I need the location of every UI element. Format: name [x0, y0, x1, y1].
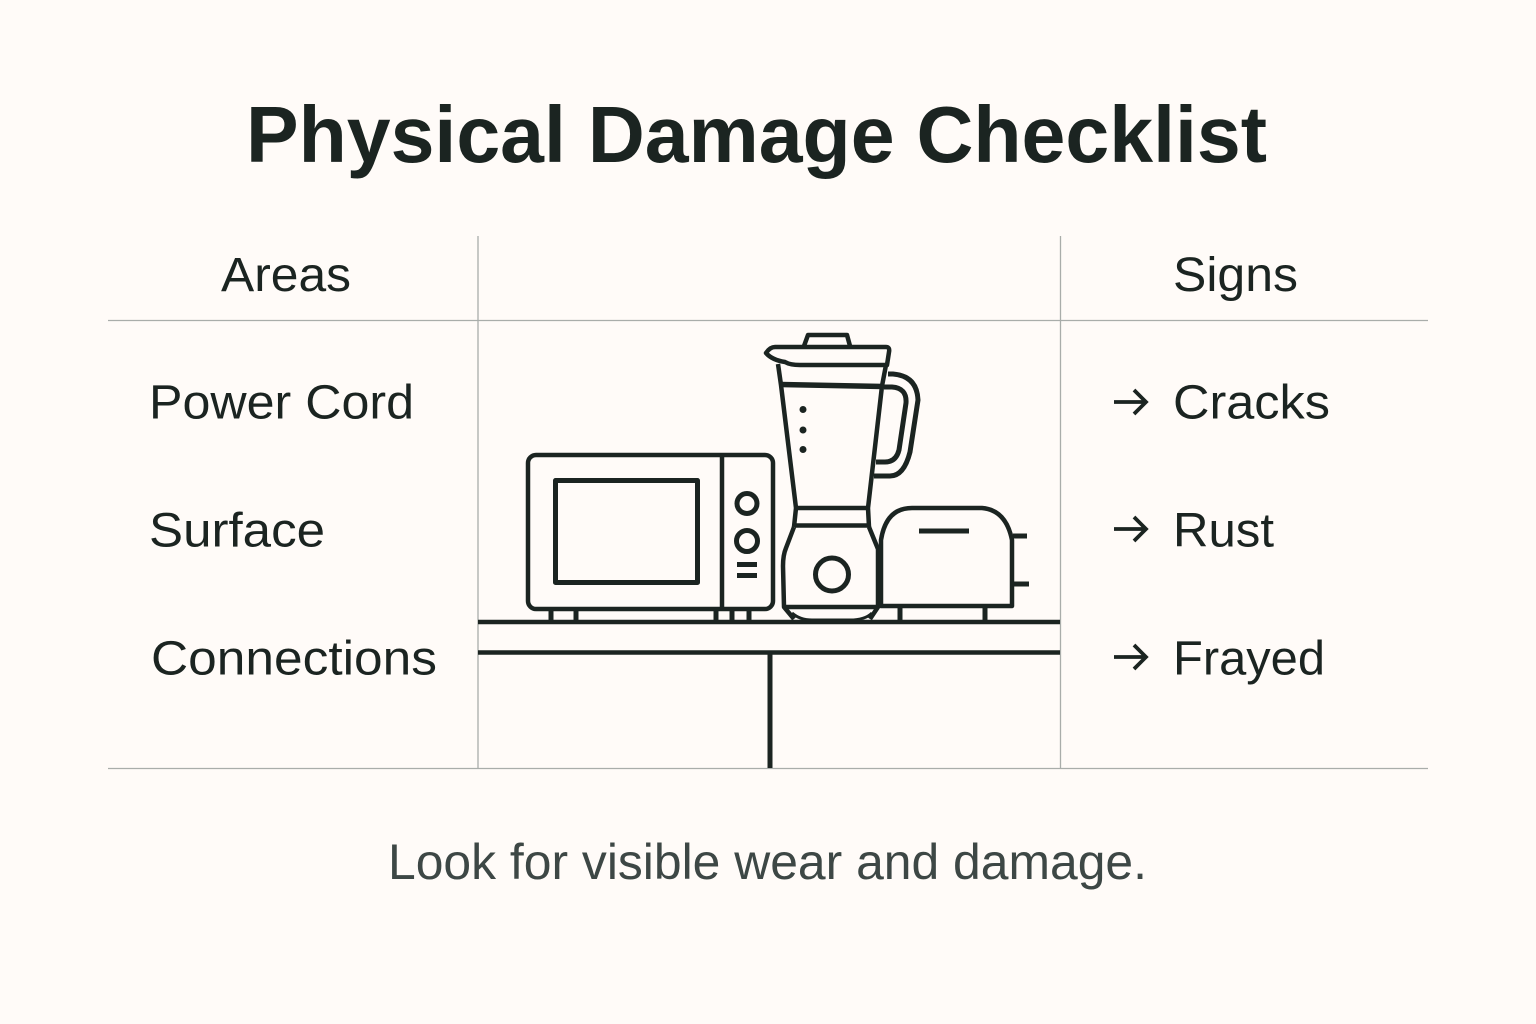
sign: frayed: Frayed: [1173, 632, 1325, 686]
arrow: frayed: [1114, 645, 1146, 669]
arrow: cracks: [1114, 390, 1146, 414]
illustration: kitchen appliances: [478, 335, 1060, 768]
icon: blender: [766, 335, 918, 620]
area: connections: Connections: [151, 632, 437, 686]
icon: microwave: [528, 455, 773, 621]
sign: cracks: Cracks: [1173, 376, 1330, 430]
heading: signs: Signs: [1173, 249, 1298, 302]
sign: rust: Rust: [1173, 504, 1274, 558]
table grid: [108, 236, 1428, 768]
title: Physical Damage Checklist: [246, 90, 1267, 179]
counter: [478, 622, 1060, 768]
caption: Look for visible wear and damage.: [388, 834, 1147, 890]
icon: toaster: [881, 508, 1029, 621]
column: signs: [1173, 249, 1330, 686]
column: areas: [149, 249, 437, 686]
arrow: rust: [1114, 517, 1146, 541]
heading: areas: Areas: [221, 249, 351, 302]
area: surface: Surface: [149, 504, 325, 558]
area: power cord: Power Cord: [149, 376, 414, 430]
